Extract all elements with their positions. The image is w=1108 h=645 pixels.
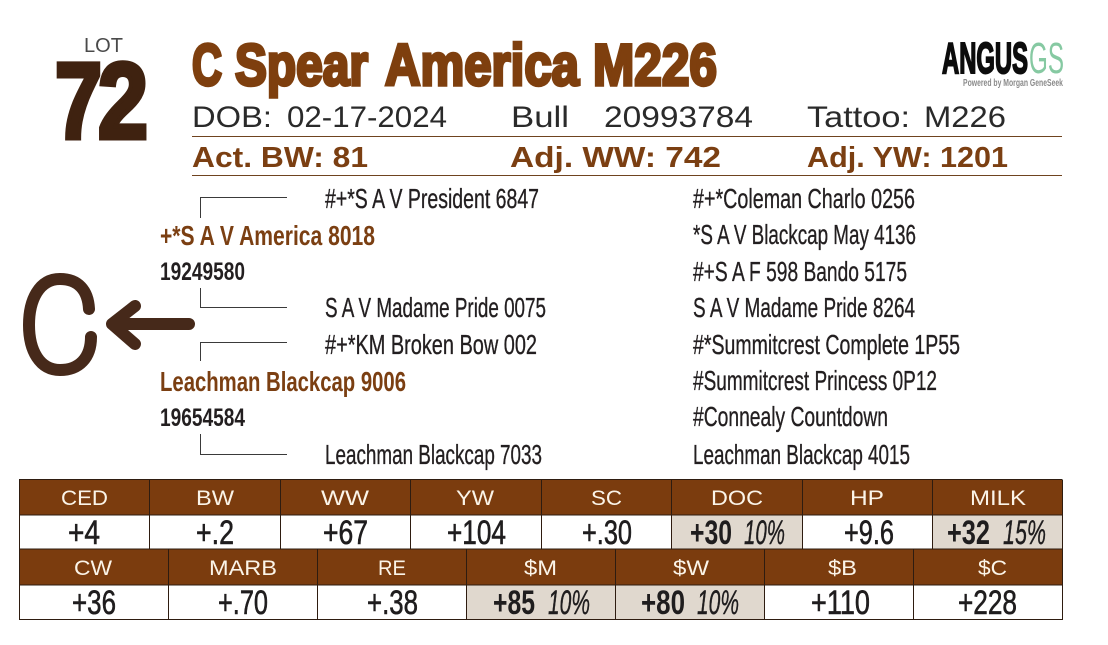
pedigree: great-grandparents — [693, 183, 960, 470]
table row 2 values: +228 — [958, 584, 1017, 622]
pedigree: grandparents: #+*KM Broken Bow 002 — [325, 329, 537, 360]
table row 1 headers: CED — [61, 487, 108, 510]
pedigree: great-grandparents: Leachman Blackcap 4015 — [693, 439, 910, 470]
logo: Angus GS — [942, 34, 1064, 89]
table backgrounds — [19, 480, 1062, 619]
table row 2 values: +36 — [72, 584, 116, 622]
table row 2 values — [72, 584, 1017, 622]
icon: letter C — [29, 279, 91, 370]
table row 2 headers: CW — [74, 557, 112, 580]
table row 2 headers: $C — [978, 557, 1007, 580]
title: America — [385, 33, 580, 98]
table row 1 values: +104 — [447, 514, 506, 552]
table row 1 values: +32 — [947, 514, 990, 552]
actual birth weight: Act. BW: 81 — [192, 142, 368, 174]
date of birth: DOB: — [192, 101, 272, 134]
pedigree: grandparents: #+*S A V President 6847 — [325, 183, 539, 214]
table row 1 headers: BW — [196, 487, 234, 510]
pedigree: great-grandparents: #+*Coleman Charlo 0256 — [693, 183, 915, 214]
table row 2 values: +.70 — [218, 584, 268, 622]
table row 2 headers: RE — [378, 557, 406, 580]
table row 2 values: 10% — [548, 584, 590, 622]
title — [192, 33, 717, 98]
pedigree: grandparents: S A V Madame Pride 0075 — [325, 292, 546, 323]
table row 2 values: +80 — [641, 584, 685, 622]
table row 1 headers: WW — [321, 487, 369, 510]
registration row: Bull — [511, 101, 569, 134]
registration row — [192, 101, 1006, 134]
table row 2 values: +.38 — [367, 584, 418, 622]
sire: +*S A V America 8018 — [160, 220, 375, 251]
pedigree brackets — [200, 198, 287, 454]
table row 1 values: +.30 — [582, 514, 632, 552]
table row 1 values: +30 — [690, 514, 732, 552]
table row 2 values: 10% — [697, 584, 739, 622]
weights row: Adj. WW: 742 — [510, 142, 721, 174]
table row 1 values: +4 — [68, 514, 100, 552]
pedigree: great-grandparents: #*Summitcrest Complete 1P55 — [693, 329, 960, 360]
table row 1 headers: YW — [456, 487, 494, 510]
pedigree: great-grandparents: #+S A F 598 Bando 5175 — [693, 256, 907, 287]
pedigree: great-grandparents: S A V Madame Pride 8264 — [693, 292, 915, 323]
EPD table — [19, 480, 1062, 622]
lot number — [55, 40, 148, 161]
weights row — [192, 142, 1008, 174]
table row 1 values: +67 — [323, 514, 368, 552]
table row 1 values: 10% — [744, 514, 785, 552]
table row 2 values: +85 — [493, 584, 535, 622]
table row 2 headers: $M — [524, 557, 557, 580]
dam: Leachman Blackcap 9006 — [160, 366, 406, 397]
pedigree: grandparents: Leachman Blackcap 7033 — [325, 439, 542, 470]
lot label: LOT — [84, 35, 123, 57]
table row 1 headers: DOC — [711, 487, 763, 510]
registration row: Tattoo: — [807, 101, 910, 134]
table row 1 headers — [61, 487, 1026, 510]
pedigree: sire and dam: 19654584 — [160, 404, 245, 432]
table row 1 values — [68, 514, 1046, 552]
lot number: 7 — [55, 40, 102, 161]
table row 2 headers: $B — [828, 557, 857, 580]
pedigree: great-grandparents: #Connealy Countdown — [693, 401, 888, 432]
table row 1 values: +9.6 — [844, 514, 894, 552]
registration row: 20993784 — [604, 101, 753, 134]
arrow pointing to C — [112, 306, 189, 344]
registration row: M226 — [924, 101, 1006, 134]
title: M226 — [593, 33, 717, 98]
table row 2 headers: MARB — [209, 557, 277, 580]
weights row: Adj. YW: 1201 — [807, 142, 1008, 174]
table row 2 headers — [74, 557, 1007, 580]
icon: C letter with arrow — [29, 279, 189, 370]
table row 1 headers: MILK — [970, 487, 1026, 510]
table row 2 headers: $W — [673, 557, 709, 580]
logo tagline: Powered by Morgan GeneSeek — [963, 78, 1063, 89]
table row 1 values: +.2 — [196, 514, 234, 552]
pedigree: sire and dam: 19249580 — [160, 258, 245, 286]
lot number: 2 — [98, 40, 148, 161]
pedigree: great-grandparents: #Summitcrest Princess 0P12 — [693, 365, 937, 396]
logo wordmark: ANGUS — [942, 34, 1028, 83]
pedigree: great-grandparents: *S A V Blackcap May 4136 — [693, 219, 916, 250]
logo GS: GS — [1029, 34, 1064, 83]
lot label and number — [55, 35, 148, 161]
registration row: 02-17-2024 — [287, 101, 447, 134]
table row 1 headers: HP — [850, 487, 884, 510]
table row 1 values: 15% — [1003, 514, 1046, 552]
pedigree: sire and dam — [160, 220, 406, 432]
title: Spear — [235, 33, 368, 98]
table row 2 values: +110 — [811, 584, 870, 622]
pedigree: grandparents — [325, 183, 546, 470]
title: C — [192, 33, 222, 98]
table row 1 headers: SC — [591, 487, 622, 510]
